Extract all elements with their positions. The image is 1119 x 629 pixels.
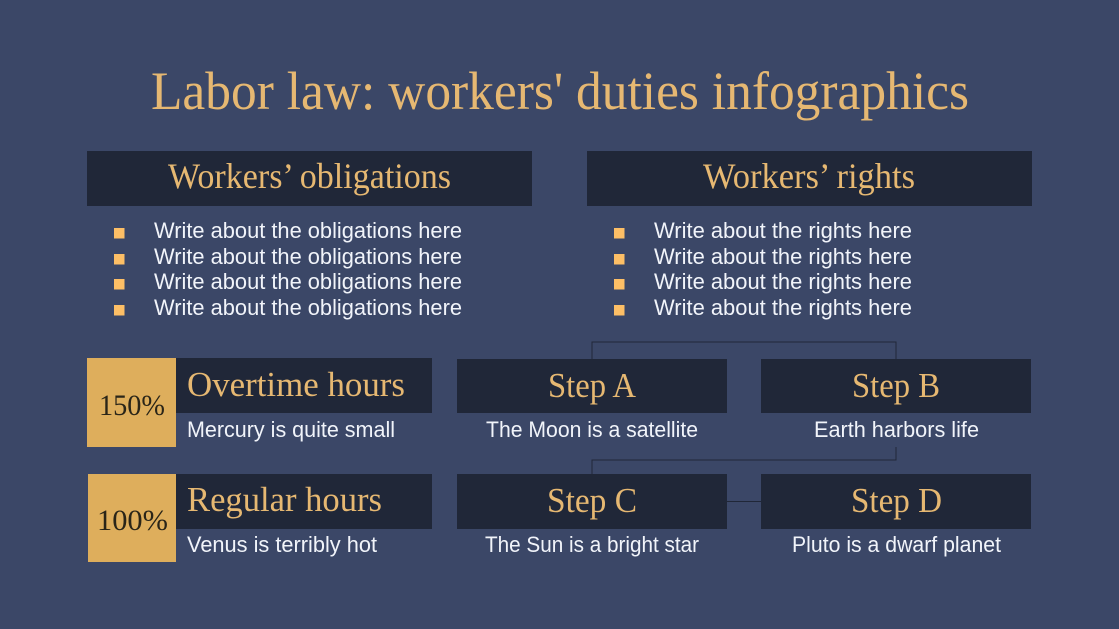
obligations bullet list: Write about the obligations here [154,269,462,294]
step A: The Moon is a satellite [486,417,698,442]
obligations bullet list [114,218,462,320]
step B: Step B [852,366,940,405]
percentage box: 150%: 150% [99,389,165,422]
title: Labor law: workers' duties infographics [151,61,969,121]
step C: Step C [547,481,637,520]
percentage box: 100% [88,474,176,562]
heading: workers' rights [587,151,1032,206]
rights bullet list [614,218,912,320]
panel: workers' obligations [87,151,532,320]
step C: The Sun is a bright star [485,532,699,557]
heading: workers' rights: Workers’ rights [703,156,915,196]
heading: workers' obligations: Workers’ obligations [168,156,451,196]
obligations bullet list: Write about the obligations here [154,295,462,320]
step B: Earth harbors life [814,417,979,442]
connector: step B to step C [592,447,896,474]
panel: regular hours: Venus is terribly hot [187,532,377,557]
heading: workers' obligations [87,151,532,206]
panel: overtime hours: Overtime hours [187,365,405,404]
rights bullet list: Write about the rights here [654,269,912,294]
obligations bullet list: Write about the obligations here [154,218,462,243]
connector: step C to step D [727,500,761,502]
panel: regular hours [88,474,432,562]
panel: overtime hours [87,358,432,447]
step B [761,359,1031,442]
step D: Pluto is a dwarf planet [792,532,1001,557]
step A: Step A [548,366,637,405]
step C [457,474,727,557]
rights bullet list: Write about the rights here [654,295,912,320]
rights bullet list: Write about the rights here [654,218,912,243]
step D [761,474,1031,557]
panel: overtime hours: Mercury is quite small [187,417,395,442]
panel: workers' rights [587,151,1032,320]
connector: step A to step B [592,342,896,359]
step D: Step D [851,481,942,520]
percentage box: 150% [87,358,176,447]
step A [457,359,727,442]
percentage box: 100%: 100% [97,504,168,537]
rights bullet list: Write about the rights here [654,244,912,269]
panel: regular hours: Regular hours [187,480,382,519]
obligations bullet list: Write about the obligations here [154,244,462,269]
